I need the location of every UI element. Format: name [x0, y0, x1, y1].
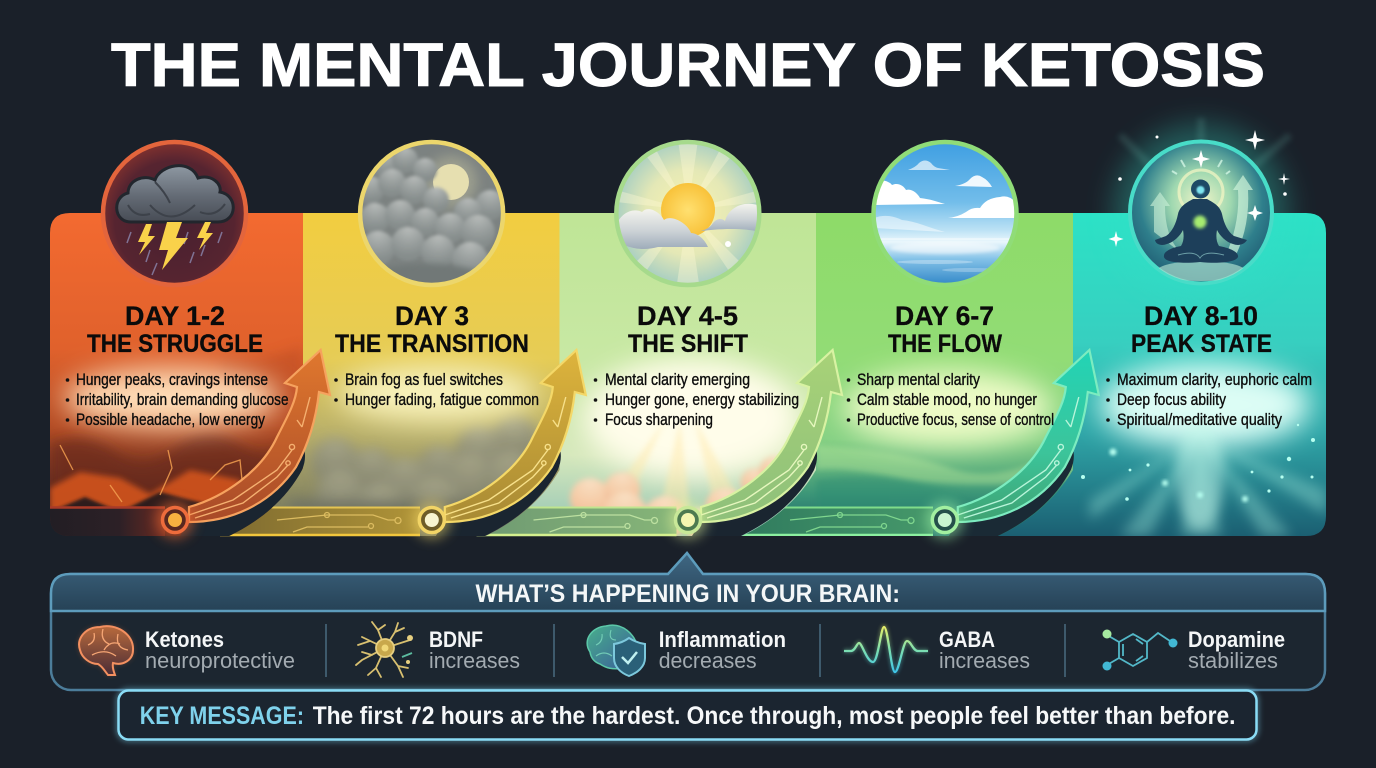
bullet list: peak state: Deep focus ability: [1117, 391, 1227, 409]
callout: key message: KEY MESSAGE:: [140, 702, 304, 730]
heading: day 1-2: DAY 1-2: [125, 301, 225, 331]
track: day 3: [220, 507, 420, 536]
bullet list: the flow: [847, 371, 1054, 429]
icon: sun breaking through clouds: [616, 140, 760, 290]
bullet list: the struggle: Irritability, brain demanding glucose: [76, 391, 288, 409]
panel: what's happening in your brain: [51, 553, 1325, 690]
item: ketones: neuroprotective: [145, 648, 295, 673]
heading: day 6-7: DAY 6-7: [895, 301, 994, 331]
bullet list: the flow: Productive focus, sense of control: [857, 411, 1054, 429]
panel: day 1-2 the struggle: [50, 142, 330, 539]
scene: sunrise through peach clouds: [570, 358, 800, 540]
item: ketones: [79, 626, 295, 675]
item: inflammation: decreases: [659, 648, 757, 673]
bullet list: the shift: [594, 371, 799, 429]
item: gaba: increases: [939, 648, 1030, 673]
panel: day 6-7 the flow: [733, 142, 1099, 539]
scene: rolling green hills: [733, 370, 1073, 536]
storm cloud: [117, 166, 233, 222]
bullet list: the flow: Calm stable mood, no hunger: [857, 391, 1037, 409]
icon: calm sky and sea: [874, 142, 1018, 285]
heading: day 6-7: THE FLOW: [888, 330, 1002, 358]
heading: day 3: DAY 3: [395, 301, 469, 331]
bullet list: the shift: Focus sharpening: [605, 411, 713, 429]
heading: day 3: [335, 301, 529, 358]
heading: what's happening: WHAT’S HAPPENING IN YOUR BRAIN:: [476, 580, 900, 608]
lightning bolts: [138, 222, 213, 270]
bullet list: the flow: Sharp mental clarity: [857, 371, 981, 389]
item: ketones: Ketones: [145, 627, 224, 652]
arrow: day 3 to day 4-5: [413, 350, 586, 539]
icon: molecule: [1102, 630, 1178, 670]
item: dopamine: Dopamine: [1188, 627, 1285, 652]
scene: light burst and particles: [1081, 363, 1326, 536]
icon: storm cloud with lightning: [103, 142, 246, 285]
icon: neuron: [356, 622, 413, 677]
heading: day 4-5: THE SHIFT: [628, 330, 748, 358]
panel: day 4-5 the shift: [476, 140, 842, 540]
item: gaba: GABA: [939, 627, 995, 652]
callout: key message: [118, 690, 1256, 740]
arrow: day 4-5 to day 6-7: [669, 350, 842, 539]
arrow: day 1-2 to day 3: [156, 350, 330, 539]
track: day 4-5: [476, 507, 676, 536]
item: inflammation: [587, 625, 786, 676]
heading: day 1-2: [87, 301, 263, 358]
title: THE MENTAL JOURNEY OF KETOSIS: [111, 31, 1265, 99]
item: bdnf: BDNF: [429, 627, 483, 652]
bullet list: the struggle: Possible headache, low energy: [76, 411, 266, 429]
heading: day 4-5: DAY 4-5: [637, 301, 738, 331]
heading: day 3: THE TRANSITION: [335, 330, 529, 358]
icon: glowing brain: [79, 626, 133, 675]
item: inflammation: Inflammation: [659, 627, 786, 652]
bullet list: the struggle: Hunger peaks, cravings intense: [76, 371, 268, 389]
bullet list: the shift: Mental clarity emerging: [605, 371, 750, 389]
scene: lava and lightning: [50, 345, 303, 536]
heading: day 8-10: [1131, 301, 1272, 358]
bullet list: peak state: [1106, 371, 1312, 429]
callout: key message: The first 72 hours are the hardest. Once through, most people feel better than before.: [313, 702, 1236, 730]
panel: day 8-10 peak state: [990, 118, 1326, 536]
icon: meditating figure in glowing circle: [1108, 118, 1290, 300]
icon: sun behind fog: [356, 142, 505, 300]
figure silhouette: [1155, 199, 1247, 263]
bullet list: the transition: Hunger fading, fatigue common: [345, 391, 539, 409]
arrow: day 6-7 to day 8-10: [926, 350, 1099, 539]
item: dopamine: [1102, 627, 1285, 673]
item: bdnf: increases: [429, 648, 520, 673]
icon: brain with shield: [587, 625, 645, 676]
heading: day 8-10: PEAK STATE: [1131, 330, 1272, 358]
bullet list: the transition: [334, 371, 539, 409]
track: day 6-7: [733, 507, 933, 536]
bullet list: peak state: Spiritual/meditative quality: [1117, 411, 1283, 429]
heading: day 6-7: [888, 301, 1002, 358]
bullet list: the transition: Brain fog as fuel switches: [345, 371, 503, 389]
bullet list: the shift: Hunger gone, energy stabilizing: [605, 391, 799, 409]
item: gaba: [844, 627, 1030, 673]
heading: day 1-2: THE STRUGGLE: [87, 330, 263, 358]
bullet list: the struggle: [66, 371, 288, 429]
panel: day 3 the transition: [220, 142, 586, 539]
icon: wave: [844, 627, 928, 672]
item: dopamine: stabilizes: [1188, 648, 1278, 673]
panel header with pointer: [51, 553, 1325, 611]
track: day 1-2: [50, 507, 165, 537]
scene: fog clouds: [290, 366, 539, 536]
heading: day 8-10: DAY 8-10: [1144, 301, 1258, 331]
bullet list: peak state: Maximum clarity, euphoric calm: [1117, 371, 1312, 389]
item: bdnf: [356, 622, 520, 677]
heading: day 4-5: [628, 301, 748, 358]
